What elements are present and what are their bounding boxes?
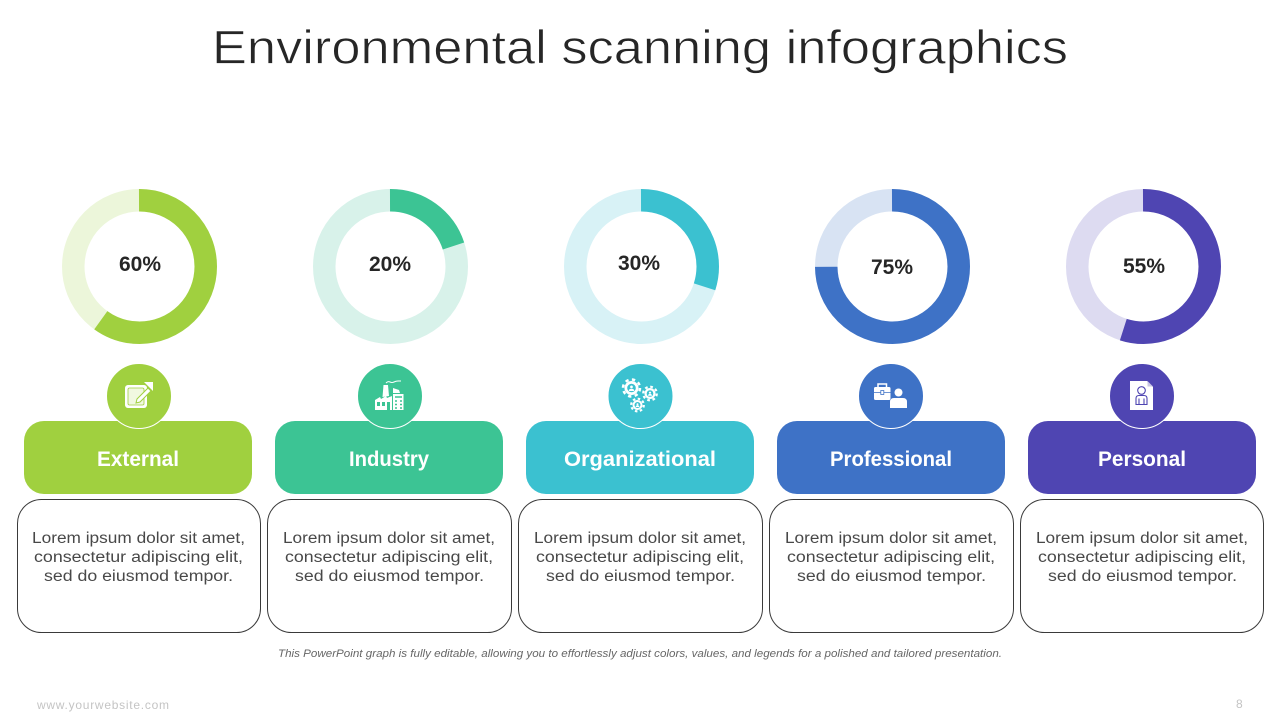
text block: personal: consectetur adipiscing elit, xyxy=(1038,549,1246,566)
heading: Organizational: Organizational xyxy=(564,448,716,471)
text block: professional xyxy=(770,500,1014,632)
donut chart: external 60% xyxy=(73,200,206,333)
donut chart: organizational 30% xyxy=(575,200,708,333)
heading: Organizational xyxy=(526,421,754,494)
text block: professional: sed do eiusmod tempor. xyxy=(797,568,986,585)
text block: external: consectetur adipiscing elit, xyxy=(34,549,243,566)
text block: personal: sed do eiusmod tempor. xyxy=(1048,568,1237,585)
caption: This PowerPoint graph is fully editable, allowing you to effortlessly adjust colors, values, and legends for a polished and tailored presentation. xyxy=(278,648,1002,660)
donut chart: industry 20% xyxy=(324,200,457,333)
icon: factory xyxy=(358,364,422,428)
text block: personal: Lorem ipsum dolor sit amet, xyxy=(1036,530,1248,547)
text block: industry: Lorem ipsum dolor sit amet, xyxy=(283,530,495,547)
text block: organizational xyxy=(518,500,762,632)
text block: personal xyxy=(1020,500,1264,632)
text block: industry xyxy=(268,500,512,632)
footer: page number: 8 xyxy=(1236,697,1243,711)
donut chart: external 60%: 60% xyxy=(119,253,161,276)
donut chart: organizational 30%: 30% xyxy=(618,252,660,275)
text block: industry: consectetur adipiscing elit, xyxy=(285,549,493,566)
heading: Industry: Industry xyxy=(349,448,429,471)
text block: professional: Lorem ipsum dolor sit amet, xyxy=(785,530,997,547)
footer: website: www.yourwebsite.com xyxy=(36,698,169,712)
heading: External: External xyxy=(97,448,179,471)
text block: organizational: sed do eiusmod tempor. xyxy=(546,568,735,585)
heading: Professional: Professional xyxy=(830,448,952,471)
heading: Personal xyxy=(1028,421,1256,494)
heading: Professional xyxy=(777,421,1005,494)
text block: industry: sed do eiusmod tempor. xyxy=(295,568,484,585)
icon: external link square xyxy=(106,364,172,428)
heading: External xyxy=(24,421,252,494)
heading: Personal: Personal xyxy=(1098,448,1186,471)
panel: external xyxy=(18,200,260,632)
donut chart: professional 75%: 75% xyxy=(871,256,913,279)
donut chart: professional 75% xyxy=(826,200,959,333)
text block: organizational: consectetur adipiscing elit, xyxy=(536,549,744,566)
text block: organizational: Lorem ipsum dolor sit amet, xyxy=(534,530,746,547)
icon: briefcase and person xyxy=(858,364,924,428)
icon: gears with people xyxy=(608,364,673,428)
text block: external: Lorem ipsum dolor sit amet, xyxy=(32,530,245,547)
panel: professional xyxy=(770,200,1014,632)
text block: professional: consectetur adipiscing elit, xyxy=(787,549,995,566)
text block: external xyxy=(18,500,260,632)
donut chart: personal 55%: 55% xyxy=(1123,255,1165,278)
title: Environmental scanning infographics xyxy=(212,20,1068,74)
panel: organizational xyxy=(518,200,762,632)
icon: person document xyxy=(1110,364,1174,428)
heading: Industry xyxy=(275,421,503,494)
panel: personal xyxy=(1020,200,1264,632)
donut chart: personal 55% xyxy=(1077,200,1210,333)
panel: industry xyxy=(268,200,512,632)
text block: external: sed do eiusmod tempor. xyxy=(44,568,233,585)
donut chart: industry 20%: 20% xyxy=(369,253,411,276)
